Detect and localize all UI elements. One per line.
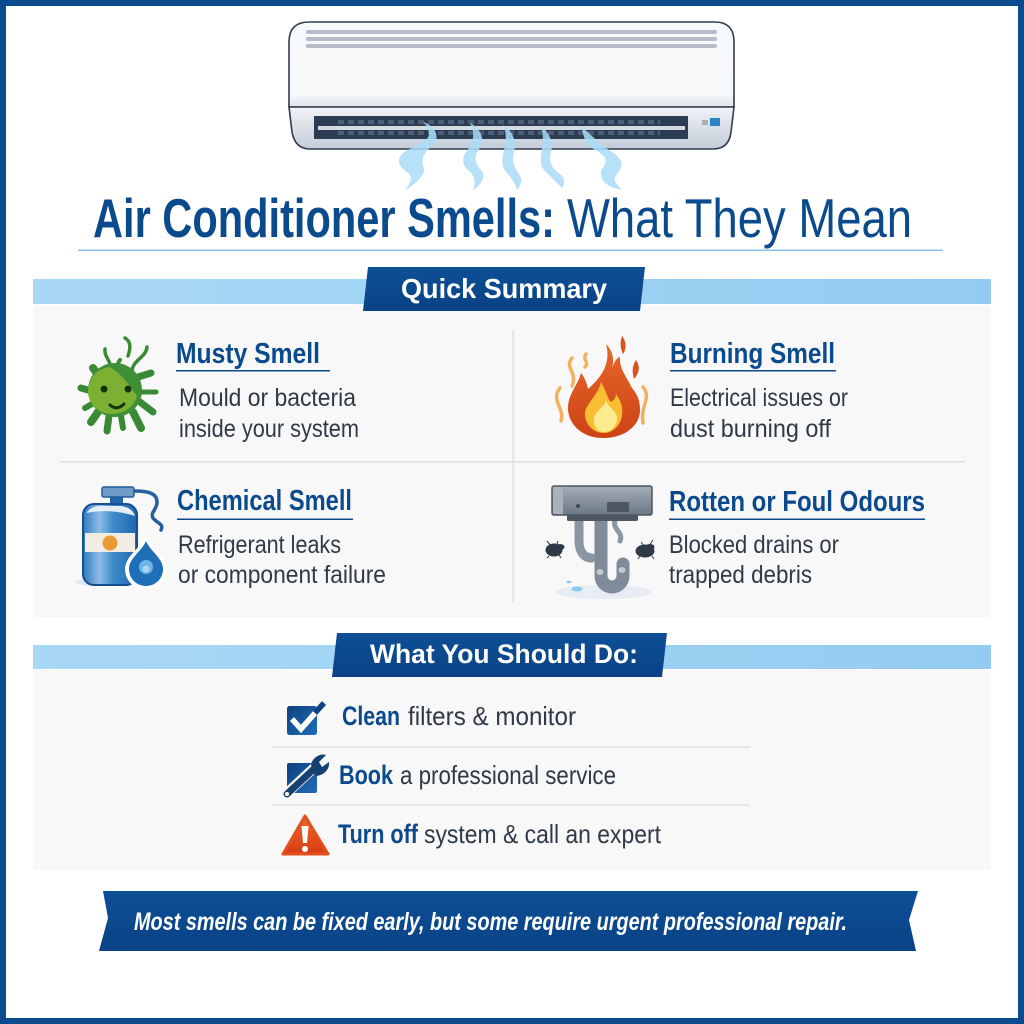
text: turn off system: Turn off — [338, 819, 419, 849]
icon: wrench — [285, 755, 329, 796]
text: musty smell — [176, 338, 359, 443]
text: musty smell: inside your system — [179, 415, 359, 443]
text: book a service — [339, 760, 616, 790]
text: burning smell: Burning Smell — [670, 338, 835, 370]
title: Air Conditioner Smells: — [93, 187, 555, 249]
text: chemical smell: or component failure — [178, 561, 386, 589]
text: rotten or foul odours: Rotten or Foul Odours — [669, 486, 925, 518]
text: burning smell: dust burning off — [670, 415, 831, 443]
text: rotten or foul odours — [669, 486, 925, 589]
text: musty smell: Mould or bacteria — [179, 384, 356, 412]
text: clean filters: Clean — [342, 701, 400, 731]
icon: blocked drain — [546, 486, 654, 599]
heading: quick summary: Quick Summary — [401, 273, 607, 304]
vent — [314, 116, 688, 139]
panel: what you should do — [33, 633, 991, 870]
title: What They Mean — [567, 187, 912, 249]
icon: warning triangle — [283, 816, 328, 854]
callout banner — [99, 891, 918, 951]
icon: flame — [556, 336, 646, 438]
text: turn off system — [338, 819, 662, 849]
heading: quick summary — [363, 267, 645, 311]
text: chemical smell — [177, 485, 386, 589]
text: book a service: Book — [339, 760, 394, 790]
icon: chemical bottle — [75, 487, 167, 590]
icon: flies — [546, 540, 654, 559]
text: burning smell: Electrical issues or — [670, 384, 848, 412]
text: clean filters — [342, 701, 576, 731]
text: musty smell: Musty Smell — [176, 338, 320, 370]
text: book a service: a professional service — [400, 760, 616, 790]
text: chemical smell: Chemical Smell — [177, 485, 352, 517]
heading: what you should do — [332, 633, 667, 677]
panel: quick summary — [33, 267, 991, 617]
text: burning smell — [670, 338, 848, 443]
text: clean filters: filters & monitor — [408, 701, 576, 731]
heading: what you should do: What You Should Do: — [370, 639, 638, 669]
text: chemical smell: Refrigerant leaks — [178, 531, 341, 559]
air conditioner unit — [289, 22, 734, 149]
text: rotten or foul odours: Blocked drains or — [669, 531, 839, 559]
text: turn off system: system & call an expert — [424, 819, 662, 849]
icon: mould germ — [81, 338, 156, 431]
callout banner: Most smells can be fixed early, but some require urgent professional repair. — [134, 908, 847, 936]
icon: checkbox — [287, 703, 324, 735]
cool air wisps — [399, 122, 622, 191]
title underline — [78, 250, 943, 251]
status lights — [702, 118, 720, 126]
text: rotten or foul odours: trapped debris — [669, 561, 812, 589]
